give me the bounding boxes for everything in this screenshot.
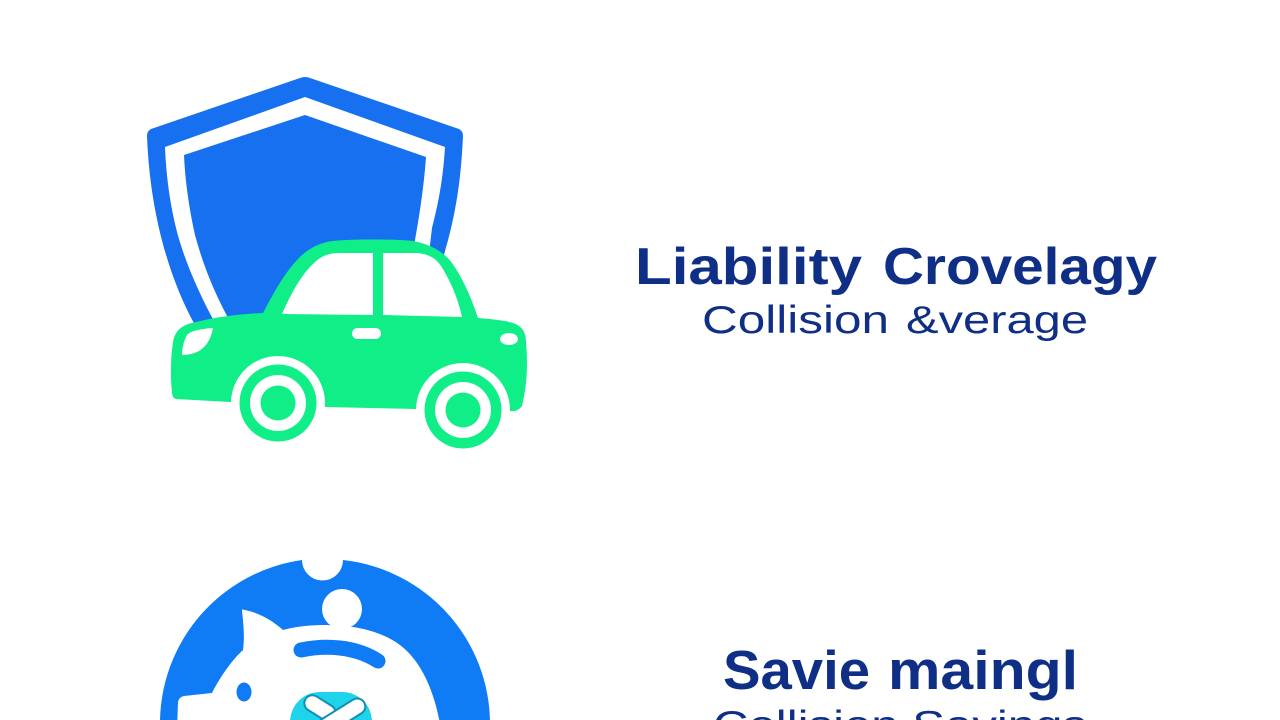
icon: car: [171, 240, 527, 460]
coin: [322, 589, 362, 629]
car door handle: [352, 328, 381, 339]
piggy body: [177, 610, 441, 720]
car headlight: [182, 328, 213, 355]
icon: shield with car: [147, 77, 527, 460]
subheading: collision: Collision: [702, 299, 889, 342]
heading: savings: maingl: [888, 639, 1078, 701]
heading: liability: Liability: [635, 238, 862, 296]
icon: shield: [147, 77, 463, 330]
front wheel: [231, 356, 325, 450]
heading: liability: Crovelagy: [883, 238, 1157, 296]
blue coin circle: [160, 560, 490, 720]
piggy eye: [236, 682, 252, 702]
icon: piggy bank savings: [160, 560, 490, 720]
coin slot: [301, 647, 378, 661]
car tail light: [500, 333, 518, 345]
heading: savings: Savie: [723, 639, 870, 701]
subheading: collision: &verage: [906, 299, 1088, 342]
heading: savings: [723, 639, 1078, 701]
medical badge: [290, 692, 372, 720]
subheading: collision: [702, 299, 1088, 342]
rear wheel: [416, 363, 510, 460]
car windows: [282, 253, 462, 317]
bandage: [301, 692, 368, 720]
heading: liability: [635, 238, 1157, 296]
